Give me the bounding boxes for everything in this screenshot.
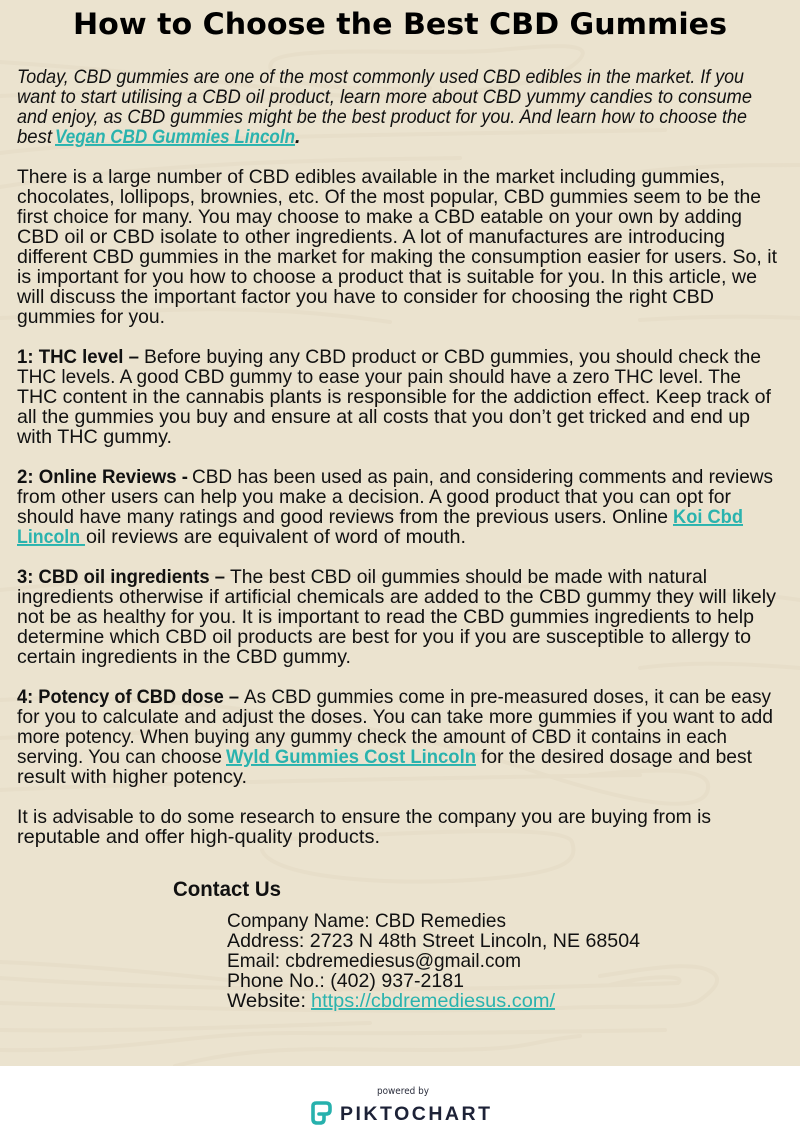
text block: introduction: Vegan CBD Gummies Lincoln (55, 126, 295, 148)
text block: introduction: . (295, 126, 300, 148)
text block: 4 Potency of CBD dose: result with higher potency. (17, 766, 247, 788)
text block: 4 Potency of CBD dose: for the desired dosage and best (481, 746, 753, 768)
text block: closing advice: reputable and offer high-quality products. (17, 826, 380, 848)
text block: 1 THC level: with THC gummy. (16, 426, 172, 448)
text block: introduction: Today, CBD gummies are one of the most commonly used CBD edibles in the market. If you (17, 66, 744, 88)
text block: 2 Online Reviews: Koi Cbd (673, 506, 743, 528)
text block: 2 Online Reviews: from other users can help you make a decision. A good product that you can opt for (17, 486, 731, 508)
text block: 1 THC level: THC levels. A good CBD gummy to ease your pain should have a zero THC level. The (17, 366, 741, 388)
text block: contact details: Address: 2723 N 48th Street Lincoln, NE 68504 (227, 930, 640, 952)
text block: 2 Online Reviews (17, 466, 773, 548)
text block: closing advice: It is advisable to do some research to ensure the company you are buying from is (17, 806, 711, 828)
text block: contact details (227, 910, 640, 1012)
text block: overview of CBD edibles: gummies for you. (17, 306, 165, 328)
text block: 4 Potency of CBD dose: Wyld Gummies Cost Lincoln (226, 746, 476, 768)
text block: introduction: best (17, 126, 54, 148)
text block: 3 CBD oil ingredients: certain ingredients in the CBD gummy. (17, 646, 351, 668)
text block: overview of CBD edibles (16, 166, 778, 328)
text block: 3 CBD oil ingredients: determine which CBD oil products are best for you if you are susceptible to allergy to (17, 626, 751, 648)
text block: introduction (17, 66, 752, 148)
text block: overview of CBD edibles: is important for you how to choose a product that is suitable for you. In this article, we (17, 266, 757, 288)
text block: closing advice (17, 806, 711, 848)
text block: overview of CBD edibles: CBD oil or CBD isolate to other ingredients. A lot of manufactures are introducing (17, 226, 725, 248)
text block: 4 Potency of CBD dose: for you to calculate and adjust the doses. You can take more gummies if you want to add (17, 706, 773, 728)
text block: 3 CBD oil ingredients: ingredients otherwise if artificial chemicals are added to the CBD gummy they will likely (17, 586, 776, 608)
text block: contact details: Company Name: CBD Remedies (227, 910, 506, 932)
text block: 4 Potency of CBD dose: serving. You can choose (17, 746, 222, 768)
text block: 1 THC level: 1: THC level – (17, 346, 139, 368)
footer: powered by piktochart: powered by (377, 1086, 429, 1097)
footer: powered by piktochart: PIKTOCHART (340, 1103, 490, 1125)
text block: 2 Online Reviews: 2: Online Reviews - (17, 466, 188, 488)
text block: overview of CBD edibles: first choice for many. You may choose to make a CBD eatable on your own by adding (17, 206, 742, 228)
text block: contact details: Website: (227, 990, 306, 1012)
text block: 3 CBD oil ingredients: 3: CBD oil ingredients – (17, 566, 225, 588)
heading: contact us: Contact Us (173, 877, 281, 901)
text block: 1 THC level: Before buying any CBD product or CBD gummies, you should check the (144, 346, 761, 368)
text block: 2 Online Reviews: oil reviews are equivalent of word of mouth. (86, 526, 466, 548)
text block: 4 Potency of CBD dose: As CBD gummies come in pre-measured doses, it can be easy (244, 686, 771, 708)
text block: 3 CBD oil ingredients: The best CBD oil gummies should be made with natural (230, 566, 707, 588)
text block: 1 THC level (16, 346, 772, 448)
footer: powered by piktochart (313, 1086, 490, 1125)
text block: overview of CBD edibles: There is a large number of CBD edibles available in the market including gummies, (17, 166, 725, 188)
text block: 2 Online Reviews: CBD has been used as pain, and considering comments and reviews (192, 466, 773, 488)
text block: 3 CBD oil ingredients: not be as healthy for you. It is important to read the CBD gummies ingredients to help (17, 606, 754, 628)
text block: introduction: and enjoy, as CBD gummies might be the best product for you. And learn how to choose the (17, 106, 747, 128)
text block: 3 CBD oil ingredients (17, 566, 776, 668)
text block: overview of CBD edibles: different CBD gummies in the market for making the consumption easier for users. So, it (17, 246, 778, 268)
text block: contact details: Phone No.: (402) 937-2181 (227, 970, 464, 992)
title: How to Choose the Best CBD Gummies (73, 7, 727, 41)
text block: 2 Online Reviews: should have many ratings and good reviews from the previous users. Online (17, 506, 668, 528)
text block: 4 Potency of CBD dose (17, 686, 773, 788)
text block: contact details: https://cbdremediesus.com/ (311, 990, 556, 1012)
text block: overview of CBD edibles: chocolates, lollipops, brownies, etc. Of the most popular, CBD gummies seem to be the (17, 186, 761, 208)
text block: overview of CBD edibles: will discuss the important factor you have to consider for choosing the right CBD (16, 286, 714, 308)
text block: contact details: Email: cbdremediesus@gmail.com (227, 950, 521, 972)
text block: 2 Online Reviews: Lincoln (17, 526, 85, 548)
text block: 4 Potency of CBD dose: 4: Potency of CBD dose – (17, 686, 239, 708)
text block: 1 THC level: THC content in the cannabis plants is responsible for the addiction effect. Keep track of (17, 386, 772, 408)
icon: piktochart logo (313, 1103, 330, 1123)
text block: 1 THC level: all the gummies you buy and ensure at all costs that you don’t get tricked and end up (17, 406, 750, 428)
text block: 4 Potency of CBD dose: more potency. When buying any gummy check the amount of CBD it contains in each (17, 726, 727, 748)
text block: introduction: want to start utilising a CBD oil product, learn more about CBD yummy candies to consume (17, 86, 752, 108)
